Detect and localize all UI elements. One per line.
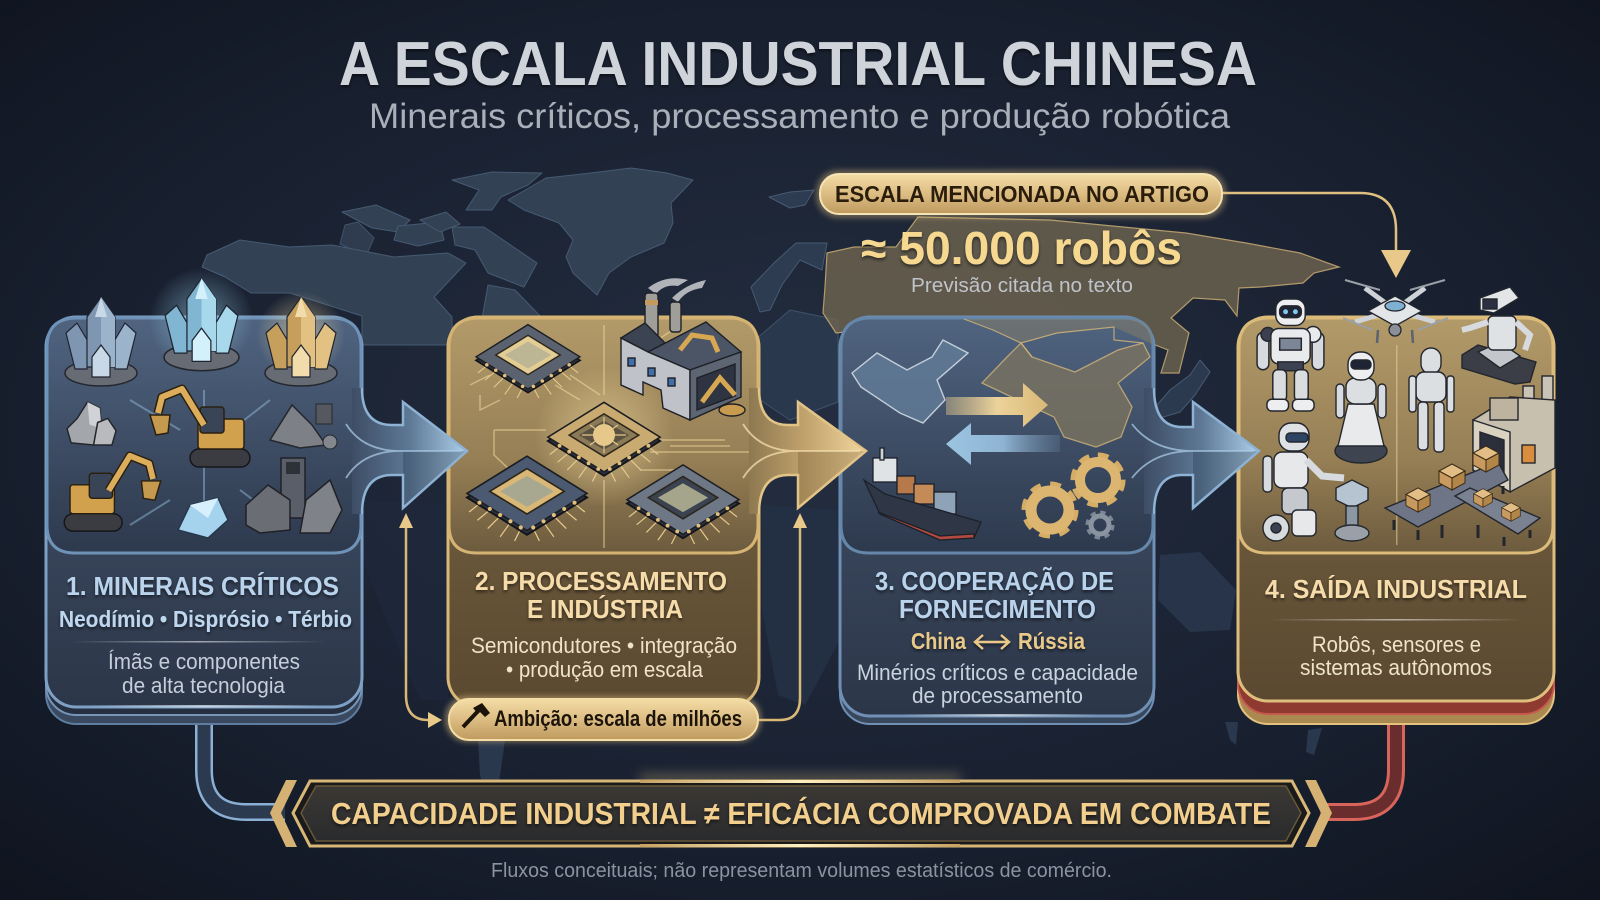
- icon: processing machine: [1473, 376, 1555, 492]
- pill: scale mentioned: [816, 170, 1226, 218]
- icon: mine tower: [246, 458, 342, 533]
- map: Russia inside panel: [964, 319, 1152, 345]
- map: Russia highlighted: [823, 217, 1339, 373]
- description: [471, 633, 737, 682]
- description: Ímãs e componentes: [108, 649, 300, 674]
- icon: excavator 1: [150, 389, 250, 467]
- icon: gears: [1026, 457, 1121, 537]
- description: sistemas autônomos: [1300, 655, 1492, 680]
- description: [108, 649, 300, 698]
- banner: [270, 774, 1332, 847]
- map: Mongolia and China in gold: [982, 343, 1150, 447]
- icon: conveyor with boxes: [1385, 446, 1540, 546]
- connector: blue tube to banner: [204, 722, 285, 812]
- arrow: left ambition loop: [399, 513, 442, 728]
- icon: chip center: [548, 402, 660, 482]
- map: China outline: [852, 340, 968, 423]
- description: de processamento: [912, 683, 1083, 708]
- icon: robot on wheel: [1263, 423, 1344, 541]
- icon: slim humanoid: [1409, 348, 1454, 452]
- heading: 2. PROCESSAMENTO: [475, 566, 727, 596]
- description: [1300, 632, 1492, 680]
- description: • produção em escala: [506, 657, 704, 682]
- panel: cooperacao de fornecimento: [840, 317, 1154, 724]
- icon: rocks left: [67, 402, 116, 445]
- footnote: Fluxos conceituais; não representam volumes estatísticos de comércio.: [491, 860, 1112, 882]
- label: Ambição: escala de milhões: [494, 706, 742, 731]
- subtitle: Minerais críticos, processamento e produção robótica: [369, 97, 1231, 136]
- connector: scale to robots: [1222, 193, 1411, 278]
- arrow: right ambition loop: [758, 513, 807, 720]
- icon: tracked robot: [1462, 287, 1536, 384]
- icon: crystal 3: [265, 297, 337, 386]
- icon: hammer: [463, 703, 490, 727]
- description: Semicondutores • integração: [471, 633, 737, 658]
- icon: factory: [621, 278, 745, 420]
- heading: E INDÚSTRIA: [527, 594, 683, 624]
- icon: crystal 1: [65, 297, 137, 386]
- heading: 3. COOPERAÇÃO DE: [875, 566, 1114, 596]
- heading: 1. MINERAIS CRÍTICOS: [66, 571, 339, 601]
- icon: crystal 2: [164, 278, 239, 371]
- icon: chip bottom left: [467, 456, 587, 541]
- pill: ambition: [445, 696, 761, 742]
- connector: blue tube core: [204, 722, 285, 812]
- China Russia line: [911, 628, 1085, 654]
- heading: 4. SAÍDA INDUSTRIAL: [1265, 574, 1527, 604]
- arrow: blue to the left: [946, 423, 1060, 465]
- circuit traces: [470, 325, 770, 548]
- icon: drone: [1343, 280, 1448, 343]
- world map: [202, 168, 1322, 800]
- arrow: gold to the right: [946, 383, 1048, 427]
- description: de alta tecnologia: [122, 673, 286, 698]
- icon: chip sun: [582, 417, 626, 453]
- icon: sensor: [1335, 480, 1369, 541]
- icon: robot 1: [1257, 299, 1324, 411]
- icon: chip top left: [476, 325, 580, 398]
- banner text: CAPACIDADE INDUSTRIAL ≠ EFICÁCIA COMPROVADA EM COMBATE: [331, 796, 1271, 831]
- China Russia line: China: [911, 628, 966, 654]
- key figure caption: Previsão citada no texto: [911, 275, 1133, 297]
- title: A ESCALA INDUSTRIAL CHINESA: [339, 30, 1257, 99]
- panel: saida industrial: [1238, 280, 1555, 724]
- heading: [875, 566, 1114, 624]
- icon: ship: [864, 448, 981, 540]
- China Russia line: Rússia: [1018, 628, 1085, 654]
- key figure: ≈ 50.000 robôs: [861, 222, 1182, 274]
- panel: minerais criticos: [46, 268, 362, 724]
- icon: chip bottom right: [627, 465, 739, 544]
- connector: red tube core: [1320, 722, 1396, 812]
- panel: processamento e industria: [448, 278, 770, 707]
- icon: service robot: [1335, 352, 1387, 463]
- description: Minérios críticos e capacidade: [857, 660, 1138, 685]
- connector: red tube outer: [1320, 722, 1396, 812]
- arrow: step 2 to 3: [743, 388, 866, 514]
- minerals list: Neodímio • Disprósio • Térbio: [59, 606, 352, 632]
- icon: excavator 2: [64, 456, 161, 531]
- heading: FORNECIMENTO: [899, 594, 1096, 624]
- heading: [475, 566, 727, 624]
- arrow: step 1 to 2: [346, 388, 467, 514]
- arrow: step 3 to 4: [1132, 388, 1259, 514]
- icon: rock pile right: [270, 404, 337, 449]
- description: [857, 660, 1138, 708]
- icon: blue gem: [178, 498, 228, 538]
- label: ESCALA MENCIONADA NO ARTIGO: [835, 181, 1209, 207]
- description: Robôs, sensores e: [1312, 632, 1481, 657]
